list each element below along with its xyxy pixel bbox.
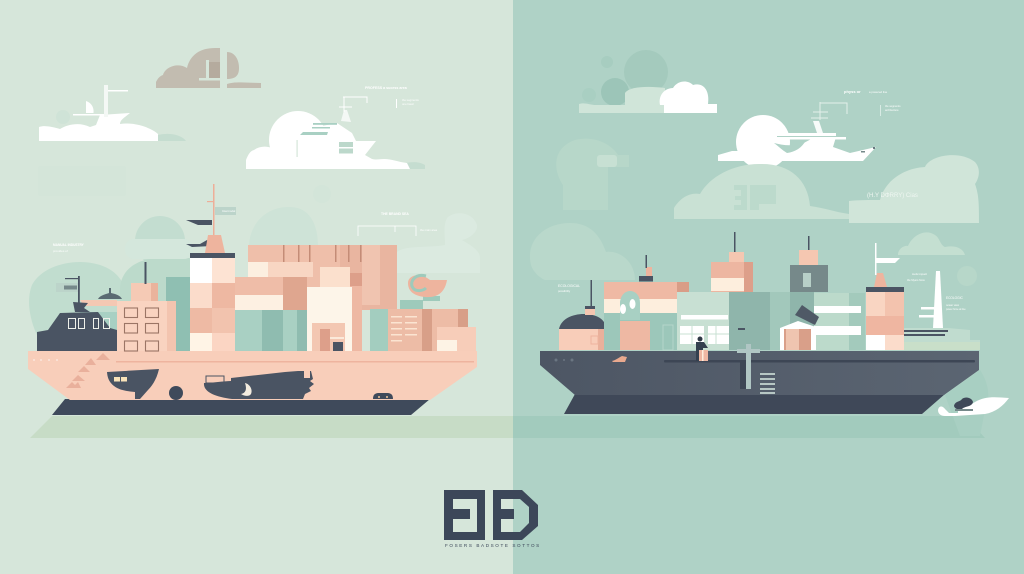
ship: left pink cargo ship (28, 184, 477, 415)
left keel (52, 399, 430, 415)
striped tower (186, 184, 236, 351)
logo and caption (444, 490, 541, 548)
teal tower group (711, 232, 828, 350)
ship: right dark cargo ship (540, 232, 1009, 416)
right background clouds (530, 223, 988, 436)
cloud: taupe with mark (156, 48, 261, 88)
container stack (226, 245, 397, 351)
left ship annotations: the main area (420, 228, 438, 232)
right ship annotations: ECOLOGICAL (558, 284, 580, 288)
label: top right of large ship (365, 86, 419, 106)
left ship annotations: provides of (53, 249, 68, 253)
hull stripe (664, 360, 975, 362)
left building with windows (117, 262, 190, 351)
right hull (540, 351, 979, 395)
left hull (28, 351, 477, 400)
small orange boat (612, 356, 627, 362)
cloud: ghost left (556, 139, 629, 210)
right ship annotations: tools impact (912, 272, 927, 276)
cloud: white with small ship (39, 85, 186, 141)
cloud: teal circles with white puff (579, 50, 717, 113)
hull marks (33, 359, 58, 361)
left bridge (37, 276, 122, 351)
hull vent stripes (760, 373, 775, 394)
white boat with dark smoke (938, 397, 1009, 416)
right ship annotations: power force at line (946, 308, 966, 311)
right keel (564, 394, 945, 414)
right ship annotations: the Myers force (907, 278, 925, 282)
right striped tower (866, 243, 904, 350)
dark hull boat three (373, 393, 393, 399)
cream warehouse (307, 267, 362, 351)
rear light superstructure (893, 271, 980, 350)
left sky clouds (39, 48, 425, 169)
right ship annotations: ECOLOGIC (946, 296, 964, 300)
left ship annotations: MANUAL INDUSTRY (53, 243, 85, 247)
water band (30, 416, 985, 438)
left ship annotations: Intermodal (222, 209, 236, 213)
label: right sky ship: physs or (844, 89, 861, 94)
right ship annotations: possibility (558, 289, 571, 293)
label: top right of large ship: one basic (402, 102, 415, 106)
cloud: pale right: (H.Y DΦRRY) Cias (867, 193, 918, 199)
right ship annotations: ocean view (946, 303, 959, 307)
right ship annotations (558, 272, 966, 311)
light block with white bars (814, 293, 865, 350)
left ship annotations: THE BRAND SEA (381, 212, 409, 216)
panel: right background (513, 0, 1024, 574)
label: top right of large ship: PROFESS a sucess area (365, 86, 408, 90)
left background clouds (29, 166, 480, 351)
cross mast on hull (737, 344, 760, 389)
dark hull boat one (107, 369, 183, 400)
label: right sky ship: architecture (885, 108, 899, 112)
label: right sky ship: the segments (885, 104, 901, 108)
cloud: pale right (849, 155, 979, 223)
dome building (559, 280, 609, 350)
hull marks (554, 358, 574, 362)
cloud: pale with mark (674, 164, 849, 219)
dark hull boat two (204, 371, 314, 399)
cloud: white with ship silhouette (718, 102, 881, 169)
hull stripe (116, 361, 474, 362)
label: right sky ship (844, 89, 901, 112)
panel: left background (0, 0, 513, 574)
right containers (370, 275, 476, 351)
label: top right of large ship: the segments (402, 98, 419, 102)
hull triangle pattern (66, 353, 110, 388)
person figure (696, 336, 708, 361)
right sky clouds (556, 50, 979, 223)
cloud: white with large ship (246, 97, 425, 169)
left ship annotations (53, 209, 438, 253)
label: right sky ship: a powered line (869, 90, 888, 94)
caption: FOSERS BADSOTE SOTTOS (445, 543, 541, 548)
pink and cream block with arch (604, 255, 689, 350)
small house (780, 305, 819, 350)
icon: logo mark (444, 490, 538, 540)
light block with windows (677, 292, 735, 350)
